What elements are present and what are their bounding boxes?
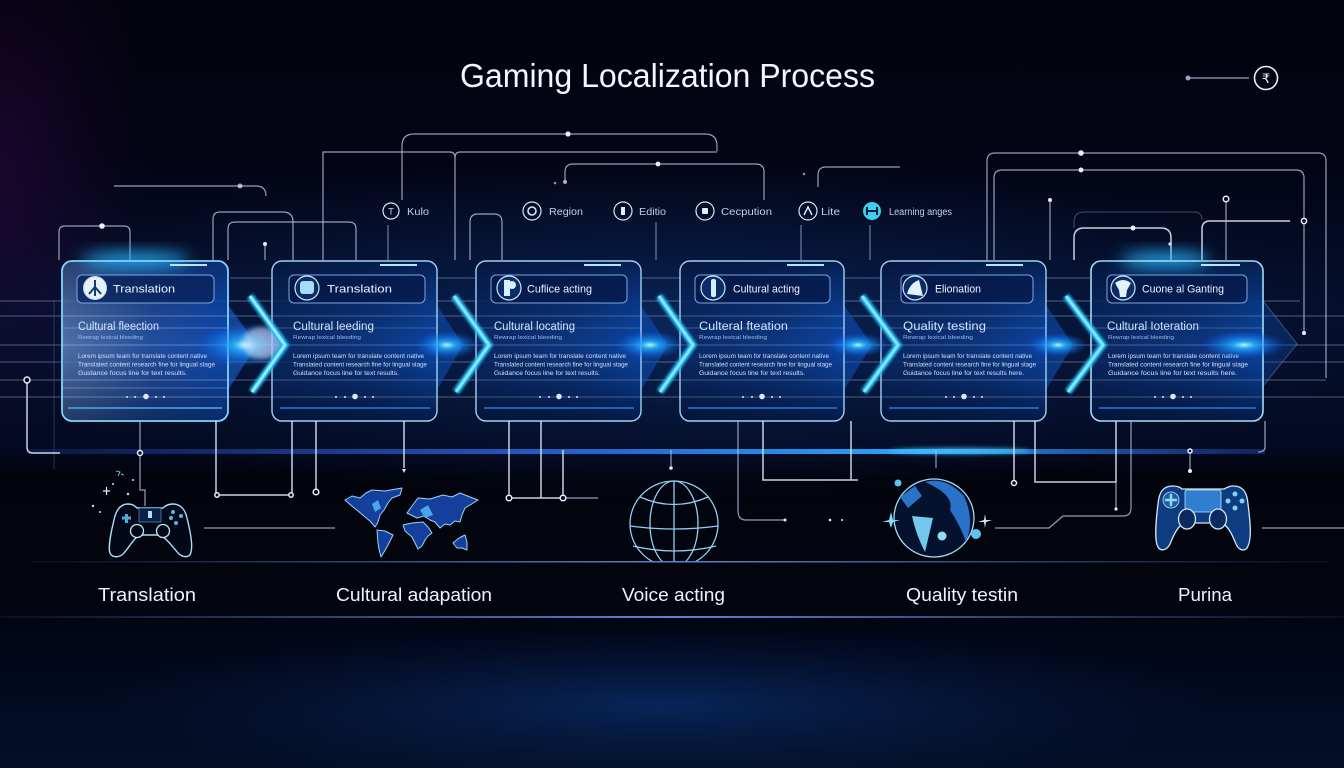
icon: world map: [345, 488, 478, 557]
header pill: [77, 275, 214, 303]
card text: [78, 321, 215, 377]
card text: [494, 321, 628, 377]
title: Gaming Localization Process: [460, 57, 875, 94]
header pill: Elionation: [935, 284, 981, 296]
legend item: Kulo: Kulo: [407, 207, 429, 218]
card text: Cultural Ioteration: [1107, 321, 1199, 333]
header pill: [695, 275, 830, 303]
arrow: chevron 2 to 3: [415, 296, 489, 392]
card text: Cultural leeding: [293, 321, 374, 333]
card text: Cultural locating: [494, 321, 575, 333]
legend item: Kulo: [383, 203, 429, 219]
card text: [903, 321, 1036, 377]
label: Cultural adapation: Cultural adapation: [336, 585, 492, 605]
connectors above the cards: [59, 131, 1326, 378]
card text: Translated content research fine for lingual stage: [699, 362, 832, 368]
pager dots: [1154, 394, 1192, 399]
arrow: chevron 5 to 6: [1028, 296, 1103, 392]
glow: step 6 output: [1202, 331, 1286, 359]
legend item: Region: [523, 202, 583, 220]
card text: Lorem ipsum team for translate content native: [78, 353, 207, 360]
header pill: [1107, 275, 1247, 303]
panel: step 2 card: [272, 261, 463, 421]
label: Voice acting: Voice acting: [622, 585, 725, 605]
icon: top right badge: ₹: [1262, 71, 1270, 86]
card text: Translated content research fine for lingual stage: [1108, 362, 1248, 368]
legend row: [383, 202, 952, 220]
card text: Rewrap lexical bleeding: [78, 335, 143, 341]
card text: Cultural fleection: [78, 321, 159, 333]
card text: Guidance focus line for text results.: [78, 370, 187, 377]
card text: [293, 321, 427, 377]
card text: Translated content research fine for lingual stage: [78, 362, 215, 368]
panel: step 1 card: [62, 253, 257, 421]
header pill: Cuflice acting: [527, 284, 592, 296]
legend item: Lite: Lite: [821, 207, 841, 218]
header pill: [491, 275, 627, 303]
icon: game controller outline: [92, 471, 192, 557]
card text: Lorem ipsum team for translate content native: [1108, 353, 1239, 360]
pager dots: [945, 394, 983, 399]
card text: Lorem ipsum team for translate content native: [903, 353, 1032, 360]
card text: Guidance focus line for text results.: [699, 370, 805, 377]
card text: Guidance focus line for text results.: [494, 370, 600, 377]
card text: Guidance focus line for text results here.: [1108, 370, 1237, 377]
divider lines: [0, 561, 1344, 618]
label: Translation: Translation: [98, 585, 196, 605]
pager dots: [742, 394, 781, 399]
card text: Translated content research fine for lingual stage: [903, 362, 1036, 368]
card text: Lorem ipsum team for translate content native: [293, 353, 424, 360]
header pill: Translation: [327, 284, 392, 296]
progress bar: [27, 448, 1265, 454]
horizontal circuit lines: [0, 278, 1344, 470]
icon: solid game controller: [1156, 486, 1250, 550]
header pill: Cuone al Ganting: [1142, 284, 1224, 296]
legend item: Languages: [863, 202, 952, 220]
arrow: chevron 1 to 2: [197, 296, 293, 392]
card text: Rewrap lexical bleeding: [903, 335, 973, 341]
card text: Lorem ipsum team for translate content native: [494, 353, 626, 360]
card text: Quality testing: [903, 321, 986, 333]
card text: Lorem ipsum team for translate content native: [699, 353, 829, 360]
card text: [699, 321, 832, 377]
card text: Guidance focus line for text results.: [293, 370, 399, 377]
icon: top right badge: [1186, 66, 1278, 90]
card text: Translated content research fine for lingual stage: [293, 362, 427, 368]
header pill: [901, 275, 1033, 303]
legend item: Editio: [614, 202, 666, 220]
arrow: chevron 3 to 4: [616, 296, 693, 392]
card text: Culteral fteation: [699, 321, 788, 333]
pager dots: [539, 394, 578, 399]
legend item: Cecpution: [696, 202, 772, 220]
legend item: Editio: Editio: [639, 207, 666, 218]
panel: step 3 card: [476, 261, 668, 421]
label: Quality testin: Quality testin: [906, 585, 1018, 605]
legend item: Region: Region: [549, 207, 583, 218]
panel: step 4 card: [680, 261, 872, 421]
card text: Rewrap lexical bleeding: [494, 335, 562, 341]
legend item: Kulo: T: [388, 206, 394, 216]
header pill: Translation: [113, 284, 175, 296]
header pill: [289, 275, 425, 303]
card text: Translated content research fine for lingual stage: [494, 362, 628, 368]
panel: step 5 card: [881, 261, 1073, 421]
icon: wireframe globe: [630, 481, 718, 567]
pager dots: [126, 394, 165, 399]
legend item: Lite: [799, 202, 841, 220]
card text: Rewrap lexical bleeding: [1108, 335, 1174, 341]
header pill: Cultural acting: [733, 284, 800, 296]
legend item: Languages: Learning anges: [889, 207, 952, 218]
card text: Rewrap lexical bleeding: [293, 335, 361, 341]
pager dots: [335, 394, 374, 399]
label: Purina: Purina: [1178, 585, 1233, 605]
card text: [1107, 321, 1248, 377]
arrow: chevron 4 to 5: [828, 296, 898, 392]
icon: earth globe: [882, 479, 992, 557]
connectors below the cards: [24, 377, 1344, 528]
panel: step 6 card: [1091, 253, 1297, 421]
legend item: Cecpution: Cecpution: [721, 207, 772, 218]
card text: Rewrap lexical bleeding: [699, 335, 767, 341]
card text: Guidance focus line for text results here.: [903, 370, 1024, 377]
